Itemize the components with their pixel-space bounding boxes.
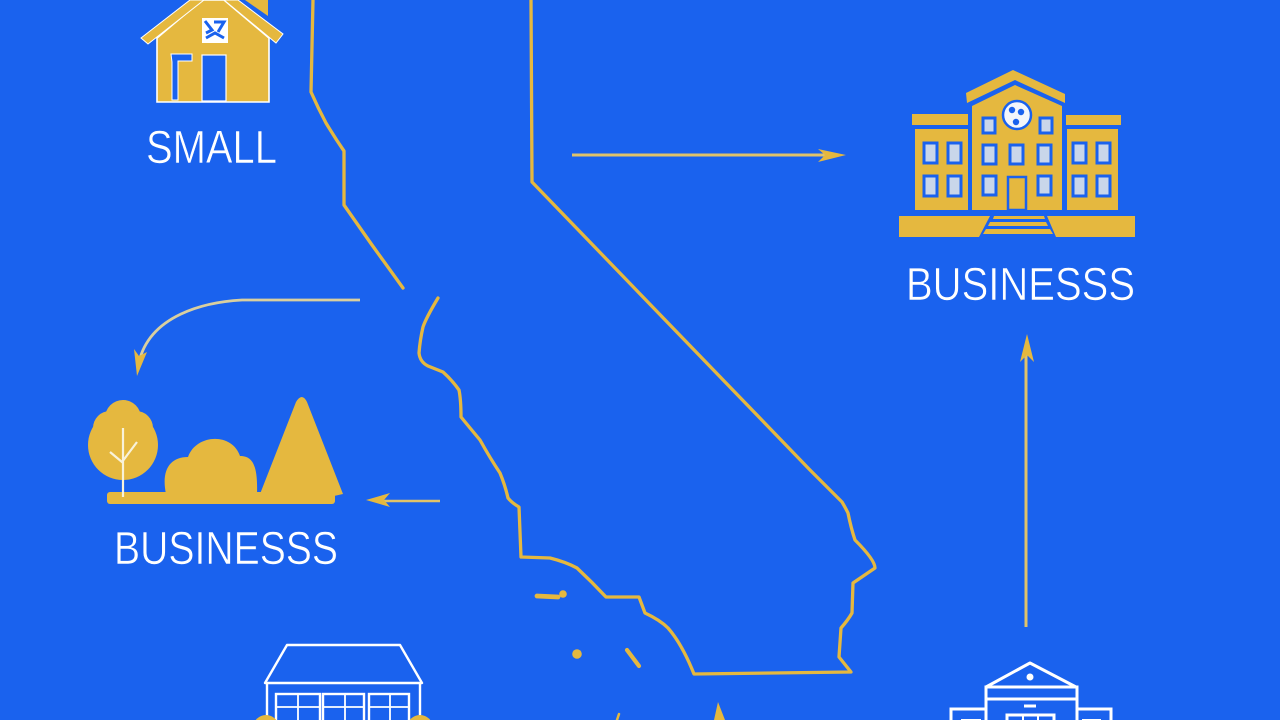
label: BUSINESSS left: BUSINESSS <box>114 522 338 574</box>
door <box>1008 177 1026 210</box>
arrow: map to business building <box>572 149 846 162</box>
icon: small house <box>141 0 283 102</box>
tree trunk <box>110 428 137 497</box>
arrow: map to park <box>366 493 440 507</box>
label: BUSINESSS right: BUSINESSS <box>906 258 1135 310</box>
icon: outlined civic building <box>951 663 1111 720</box>
windows <box>924 118 1110 196</box>
icon: outlined storefront <box>253 645 433 720</box>
arrow: bottom tip <box>714 702 725 720</box>
arrow: bottom building to business <box>1020 334 1034 627</box>
map: islands <box>537 590 639 720</box>
steps <box>983 216 1053 234</box>
clock window <box>1003 101 1031 129</box>
label: SMALL: SMALL <box>146 121 277 173</box>
icon: park with tree, bush and hill <box>88 397 343 504</box>
map: California outline <box>311 0 875 674</box>
arrow: map curve to park <box>134 300 360 376</box>
icon: business school building <box>899 70 1135 237</box>
